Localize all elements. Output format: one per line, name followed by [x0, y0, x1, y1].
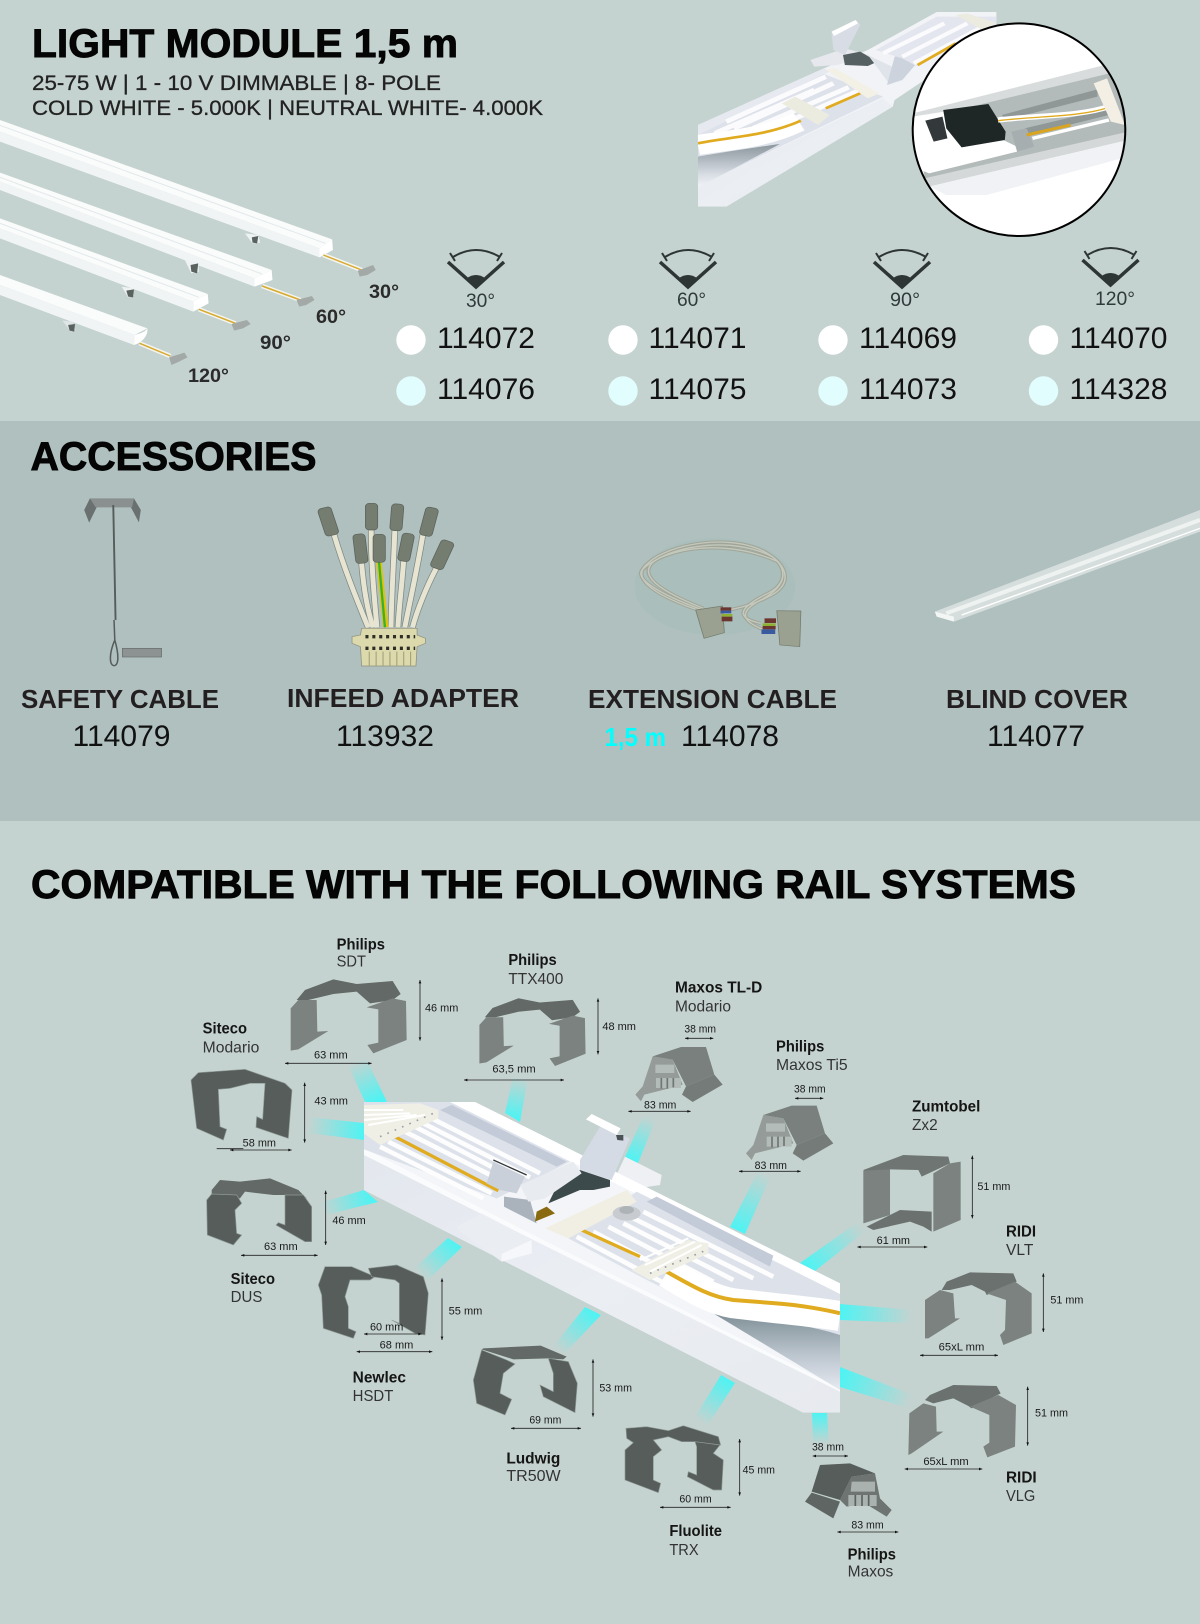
profile: Ludwig TR50W: 53 mm: [599, 1383, 632, 1395]
subtitle text block: 25-75 W | 1 - 10 V DIMMABLE | 8- POLE: [32, 72, 441, 95]
cross bar: [532, 1190, 627, 1238]
angle labels for modules: [188, 282, 399, 387]
profile: Philips TTX400: Philips: [508, 952, 557, 969]
module 30 degrees: [0, 120, 376, 277]
article numbers 90 degrees: 114069: [859, 322, 957, 355]
profile: Philips Maxos Ti5: Maxos Ti5: [776, 1057, 848, 1074]
label: extension cable: 114078: [681, 720, 779, 753]
right mounting tab: [613, 1157, 662, 1190]
article numbers 30 degrees: 114072: [437, 322, 535, 355]
article numbers 120 degrees: [1029, 322, 1168, 406]
profile: Ludwig TR50W: [473, 1346, 632, 1485]
profile: Maxos TL-D Modario: [628, 980, 762, 1111]
profile: RIDI VLG: 51 mm: [1035, 1408, 1068, 1420]
profile: Philips TTX400: 63,5 mm: [492, 1064, 536, 1076]
teal connector beams: [308, 1060, 913, 1445]
profile: Philips SDT: SDT: [337, 954, 366, 971]
heading: compatible rail systems: COMPATIBLE WITH THE FOLLOWING RAIL SYSTEMS: [31, 863, 1076, 907]
profiles upper left: [191, 936, 636, 1306]
article numbers 60 degrees: [608, 322, 746, 406]
profile: Philips Maxos: 83 mm: [851, 1519, 884, 1531]
profile: Zumtobel Zx2: 51 mm: [977, 1181, 1010, 1193]
comb right: [632, 1240, 708, 1280]
article numbers 30 degrees: [396, 322, 535, 406]
profile: Siteco DUS: [207, 1178, 366, 1306]
centre clip housing: [504, 1197, 537, 1223]
article numbers 90 degrees: 114073: [859, 373, 957, 406]
profile: Philips Maxos: Philips: [848, 1546, 896, 1563]
article numbers 30 degrees: 114076: [437, 373, 535, 406]
profile: Newlec HSDT: 68 mm: [380, 1339, 413, 1351]
profile: Maxos TL-D Modario: 83 mm: [644, 1099, 676, 1111]
label: blind cover: [946, 684, 1128, 753]
profile: Philips SDT: 46 mm: [425, 1003, 458, 1015]
beam label 60: 60°: [677, 290, 706, 311]
icon: beam angle 120: [1082, 248, 1138, 287]
rail body: [364, 1102, 840, 1413]
profile: Philips Maxos Ti5: [739, 1039, 848, 1172]
profile: Philips SDT: [285, 936, 458, 1063]
module 90 degrees: [0, 218, 251, 331]
top right product photo with zoom circle: [698, 12, 1128, 236]
label: safety cable: 114079: [72, 720, 170, 753]
article numbers 120 degrees: 114328: [1070, 373, 1168, 406]
title: LIGHT MODULE 1,5 m: [32, 22, 458, 66]
profile: Siteco DUS: 63 mm: [264, 1241, 298, 1253]
profile: Newlec HSDT: 60 mm: [370, 1322, 403, 1334]
label: safety cable: SAFETY CABLE: [21, 684, 219, 714]
profile: Philips TTX400: 48 mm: [602, 1021, 636, 1033]
cavity: [548, 1170, 610, 1203]
upper lip: [450, 1102, 840, 1294]
icon: beam angle 90: [874, 250, 930, 289]
profile: Philips Maxos Ti5: 38 mm: [794, 1084, 826, 1096]
profile: Siteco Modario: Modario: [203, 1039, 259, 1056]
profile: Philips Maxos Ti5: 83 mm: [755, 1160, 787, 1172]
label: safety cable: [21, 684, 219, 753]
article numbers 120 degrees: 114070: [1070, 322, 1168, 355]
profile: Maxos TL-D Modario: 38 mm: [684, 1024, 716, 1036]
profile: Maxos TL-D Modario: Modario: [675, 999, 731, 1016]
profile: Newlec HSDT: 55 mm: [449, 1305, 482, 1317]
channel right: [568, 1192, 840, 1335]
profile: Philips Maxos: Maxos: [848, 1564, 893, 1581]
profile: Siteco DUS: 46 mm: [332, 1215, 366, 1227]
comb left: [364, 1103, 438, 1145]
profile: RIDI VLT: [920, 1224, 1083, 1355]
profile: RIDI VLT: RIDI: [1006, 1224, 1036, 1241]
profile: Philips TTX400: TTX400: [508, 971, 563, 988]
rail joint photo: [698, 12, 996, 207]
profile: Siteco Modario: Siteco: [203, 1020, 247, 1037]
icon: safety cable: [84, 498, 161, 666]
profile: Newlec HSDT: [318, 1265, 482, 1405]
profile: Siteco DUS: Siteco: [231, 1271, 275, 1288]
profile: RIDI VLT: 51 mm: [1050, 1294, 1083, 1306]
profile: Siteco DUS: DUS: [231, 1289, 262, 1306]
profile: Ludwig TR50W: TR50W: [506, 1468, 562, 1485]
profile: Zumtobel Zx2: Zumtobel: [912, 1099, 980, 1116]
profile: Fluolite TRX: 45 mm: [743, 1464, 775, 1476]
profile: RIDI VLG: RIDI: [1006, 1470, 1037, 1487]
profile: Siteco Modario: 58 mm: [243, 1138, 276, 1150]
profile: Philips SDT: 63 mm: [314, 1049, 348, 1061]
profile: Philips Maxos Ti5: Philips: [776, 1039, 825, 1056]
article numbers 60 degrees: 114071: [648, 322, 746, 355]
profile: Philips SDT: Philips: [337, 936, 385, 953]
front face: [364, 1153, 840, 1413]
profile: Philips Maxos: [805, 1442, 898, 1581]
panel: accessories band: [0, 421, 1200, 821]
profile: RIDI VLG: [905, 1385, 1068, 1505]
icon: extension cable: [634, 538, 801, 647]
label: extension cable: [588, 684, 837, 753]
label: blind cover: BLIND COVER: [946, 684, 1128, 714]
profile: Fluolite TRX: TRX: [669, 1542, 699, 1559]
profiles upper right: [628, 980, 1083, 1355]
icon: beam angle 30: [448, 250, 504, 289]
label: extension cable: EXTENSION CABLE: [588, 684, 837, 714]
channel left: [364, 1102, 570, 1198]
label: infeed adapter: INFEED ADAPTER: [287, 683, 519, 713]
icon: beam angle 60: [660, 250, 716, 289]
label: infeed adapter: [287, 683, 519, 753]
subtitle text block: [32, 72, 543, 120]
profile: Philips Maxos: 38 mm: [812, 1442, 844, 1454]
main rail illustration: [364, 1102, 840, 1413]
icon: blind cover: [935, 510, 1200, 622]
article numbers 90 degrees: [818, 322, 957, 406]
beam label 120: 120°: [1095, 289, 1135, 310]
module 60 degrees: [0, 173, 315, 307]
profile: Newlec HSDT: Newlec: [353, 1370, 406, 1387]
wires curve: [667, 1273, 840, 1316]
profile: Ludwig TR50W: 69 mm: [529, 1414, 561, 1426]
angle labels for modules: 90°: [260, 333, 291, 354]
profile: Ludwig TR50W: Ludwig: [506, 1450, 560, 1467]
icon: infeed adapter: [317, 503, 455, 666]
subtitle text block: COLD WHITE - 5.000K | NEUTRAL WHITE- 4.000K: [32, 97, 543, 120]
beam label 90: 90°: [890, 290, 920, 311]
screw: [613, 1206, 641, 1221]
hollow under wires: [713, 1313, 840, 1390]
label: infeed adapter: 113932: [336, 720, 434, 753]
light modules illustration: [0, 120, 376, 365]
profile: Maxos TL-D Modario: Maxos TL-D: [675, 980, 762, 997]
label: extension cable: 1,5 m: [604, 722, 666, 752]
profiles lower right: [805, 1385, 1068, 1581]
label: blind cover: 114077: [987, 720, 1085, 753]
cover plate: [520, 1162, 582, 1202]
article numbers 60 degrees: 114075: [648, 373, 746, 406]
profile: Fluolite TRX: Fluolite: [669, 1523, 722, 1540]
angle labels for modules: 30°: [369, 282, 399, 303]
profile: RIDI VLG: VLG: [1006, 1488, 1035, 1505]
profile: RIDI VLG: 65xL mm: [923, 1456, 969, 1468]
module 120 degrees: [0, 275, 187, 365]
profile: Zumtobel Zx2: [857, 1099, 1010, 1247]
zoom circle: [913, 23, 1128, 236]
profiles lower left: [318, 1265, 775, 1559]
beam label 30: 30°: [466, 291, 495, 312]
profile: Fluolite TRX: 60 mm: [679, 1494, 712, 1506]
profile: Newlec HSDT: HSDT: [353, 1388, 394, 1405]
left mounting tab: [457, 1213, 532, 1262]
profile: RIDI VLT: 65xL mm: [939, 1342, 984, 1354]
profile: Fluolite TRX: [625, 1426, 775, 1559]
angle labels for modules: 60°: [316, 307, 346, 328]
profile: Zumtobel Zx2: 61 mm: [877, 1235, 910, 1247]
angle labels for modules: 120°: [188, 366, 229, 387]
heading: accessories: ACCESSORIES: [30, 435, 316, 479]
profile: Siteco Modario: 43 mm: [314, 1095, 348, 1107]
profile: Zumtobel Zx2: Zx2: [912, 1117, 938, 1134]
profile: Philips TTX400: [464, 952, 636, 1080]
profile: RIDI VLT: VLT: [1006, 1242, 1034, 1259]
profile: Siteco Modario: [191, 1020, 348, 1150]
upright clip: [580, 1127, 630, 1180]
